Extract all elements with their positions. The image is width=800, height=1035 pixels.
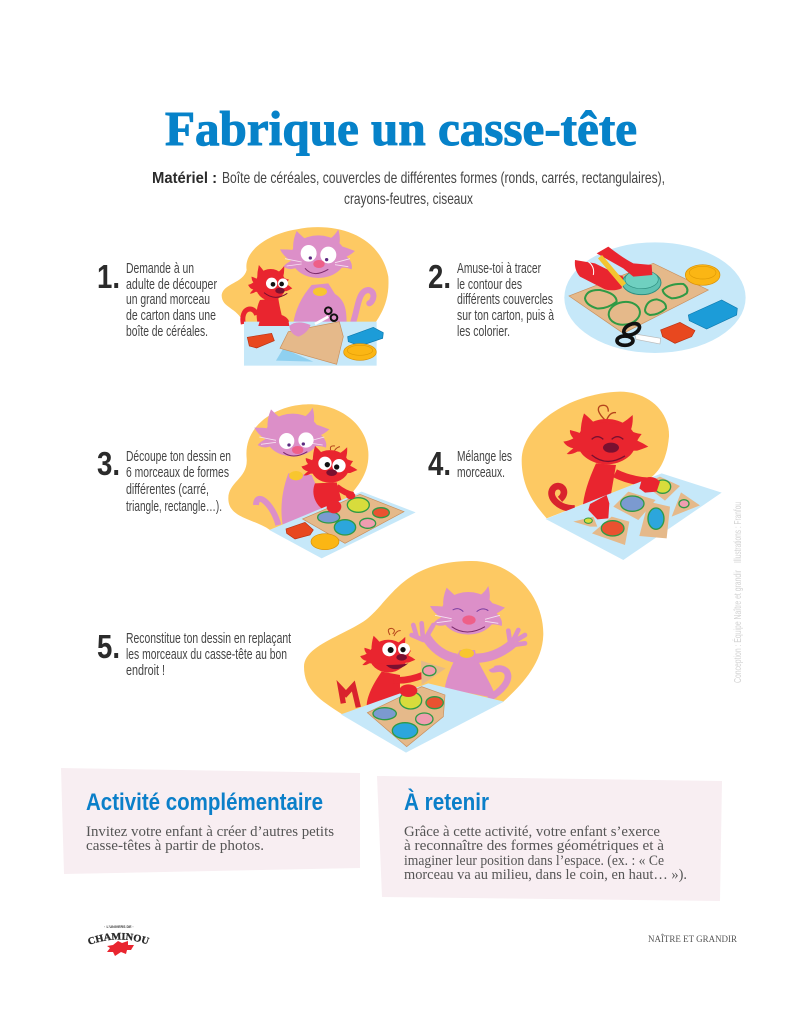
- step 4 text: Mélange les: [457, 449, 512, 465]
- panel: activité complémentaire: Activité complémentaire: [86, 789, 323, 816]
- step 2 text: le contour des: [457, 277, 522, 293]
- step 1 text: Demande à un: [126, 261, 194, 277]
- logo: l'univers de Chaminou: CHAMINOU: [88, 932, 150, 944]
- panel: à retenir: Grâce à cette activité, votre enfant s’exerce: [404, 824, 660, 840]
- step 2 text: [428, 258, 555, 340]
- step 5 text: Reconstitue ton dessin en replaçant: [126, 631, 291, 647]
- illustration: step 5, rebuilding the puzzle: [304, 561, 543, 753]
- panel: à retenir: À retenir: [404, 788, 489, 816]
- step 3 text: [97, 445, 231, 515]
- brand: Naître et Grandir: NAÎTRE ET GRANDIR: [648, 933, 738, 945]
- step 5 text: [97, 628, 291, 679]
- panel: activité complémentaire: [61, 768, 360, 874]
- panel: activité complémentaire: Invitez votre enfant à créer d’autres petits: [86, 824, 334, 840]
- step 4 text: [428, 445, 512, 482]
- panel: à retenir: à reconnaître des formes géométriques et à: [404, 838, 665, 854]
- step 1 text: un grand morceau: [126, 292, 210, 308]
- step 5 text: les morceaux du casse-tête au bon: [126, 647, 287, 663]
- credits: Illustrations : Franfou: [732, 502, 744, 563]
- panel: à retenir: [377, 776, 722, 901]
- logo: l'univers de Chaminou: · L'UNIVERS DE ·: [104, 925, 134, 929]
- step 3 text: 3.: [97, 445, 120, 482]
- step 3 text: différentes (carré,: [126, 482, 209, 498]
- illustration: step 1, cats cutting a cereal box: [222, 227, 389, 366]
- step 2 text: les colorier.: [457, 324, 510, 340]
- step 1 text: [97, 258, 217, 340]
- step 2 text: Amuse-toi à tracer: [457, 261, 541, 277]
- step 1 text: de carton dans une: [126, 308, 216, 324]
- title: Fabrique un casse-tête: [165, 101, 637, 156]
- step 1 text: boîte de céréales.: [126, 324, 208, 340]
- panel: à retenir: morceau va au milieu, dans le coin, en haut… »).: [404, 867, 687, 883]
- step 5 text: endroit !: [126, 663, 165, 679]
- materials list: crayons-feutres, ciseaux: [344, 191, 473, 208]
- step 2 text: 2.: [428, 258, 451, 295]
- step 3 text: Découpe ton dessin en: [126, 449, 231, 465]
- credits: Conception : Équipe Naître et grandir: [731, 570, 744, 683]
- step 1 text: adulte de découper: [126, 277, 217, 293]
- step 1 text: 1.: [97, 258, 120, 295]
- step 2 text: sur ton carton, puis à: [457, 308, 555, 324]
- materials list: Boîte de céréales, couvercles de différentes formes (ronds, carrés, rectangulaires),: [222, 170, 665, 187]
- illustration: step 2, tracing lids on cardboard: [564, 242, 746, 353]
- materials list: Matériel :: [152, 170, 217, 187]
- step 3 text: triangle, rectangle…).: [126, 499, 222, 515]
- panel: activité complémentaire: casse-têtes à partir de photos.: [86, 838, 264, 854]
- materials list: [152, 170, 665, 208]
- illustration: step 4, red cat mixing pieces: [522, 392, 722, 560]
- logo: l'univers de Chaminou: [88, 925, 150, 956]
- step 5 text: 5.: [97, 628, 120, 665]
- illustration: step 3, cutting the drawing: [228, 404, 416, 558]
- step 3 text: 6 morceaux de formes: [126, 465, 229, 481]
- step 4 text: 4.: [428, 445, 451, 482]
- step 2 text: différents couvercles: [457, 292, 553, 308]
- step 4 text: morceaux.: [457, 465, 505, 481]
- panel: à retenir: imaginer leur position dans l’espace. (ex. : « Ce: [404, 853, 664, 869]
